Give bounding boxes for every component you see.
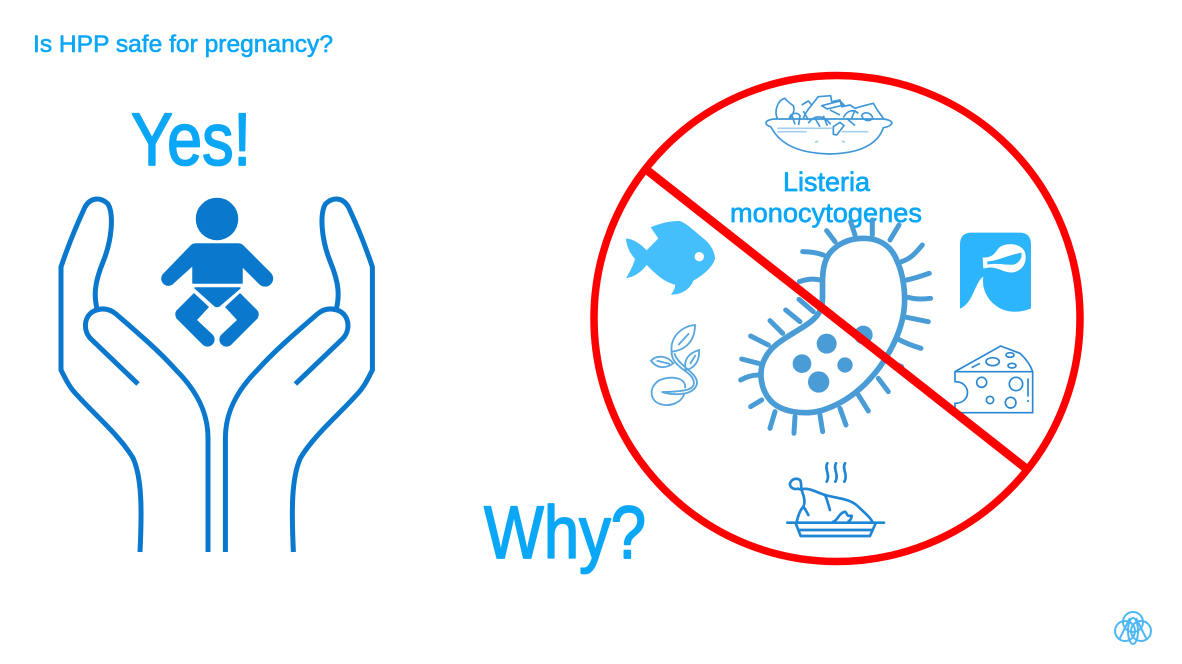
prohibition sign [594, 76, 1080, 562]
text: pathogen name [730, 167, 922, 228]
icon: bacterium [741, 220, 931, 433]
icon: baby [162, 198, 272, 346]
prohibition bar [643, 167, 1028, 470]
label: monocytogenes: monocytogenes [730, 198, 922, 228]
icon: cheese [955, 346, 1033, 413]
title: Is HPP safe for pregnancy? [33, 31, 333, 58]
icon: left hand [61, 199, 208, 552]
icon: salad bowl [766, 96, 892, 154]
icon: hands holding baby [61, 198, 372, 552]
icon: right hand [225, 199, 372, 552]
prohibition circle [594, 76, 1080, 562]
icon: sprout [651, 325, 699, 405]
heading: Yes: Yes! [131, 98, 251, 181]
icon: fish [626, 221, 715, 295]
label: Listeria: Listeria [783, 167, 871, 197]
icon: milk pitcher [960, 233, 1031, 312]
icon: roast chicken [787, 463, 884, 536]
heading: Why: Why? [484, 491, 646, 574]
logo [1115, 612, 1151, 644]
